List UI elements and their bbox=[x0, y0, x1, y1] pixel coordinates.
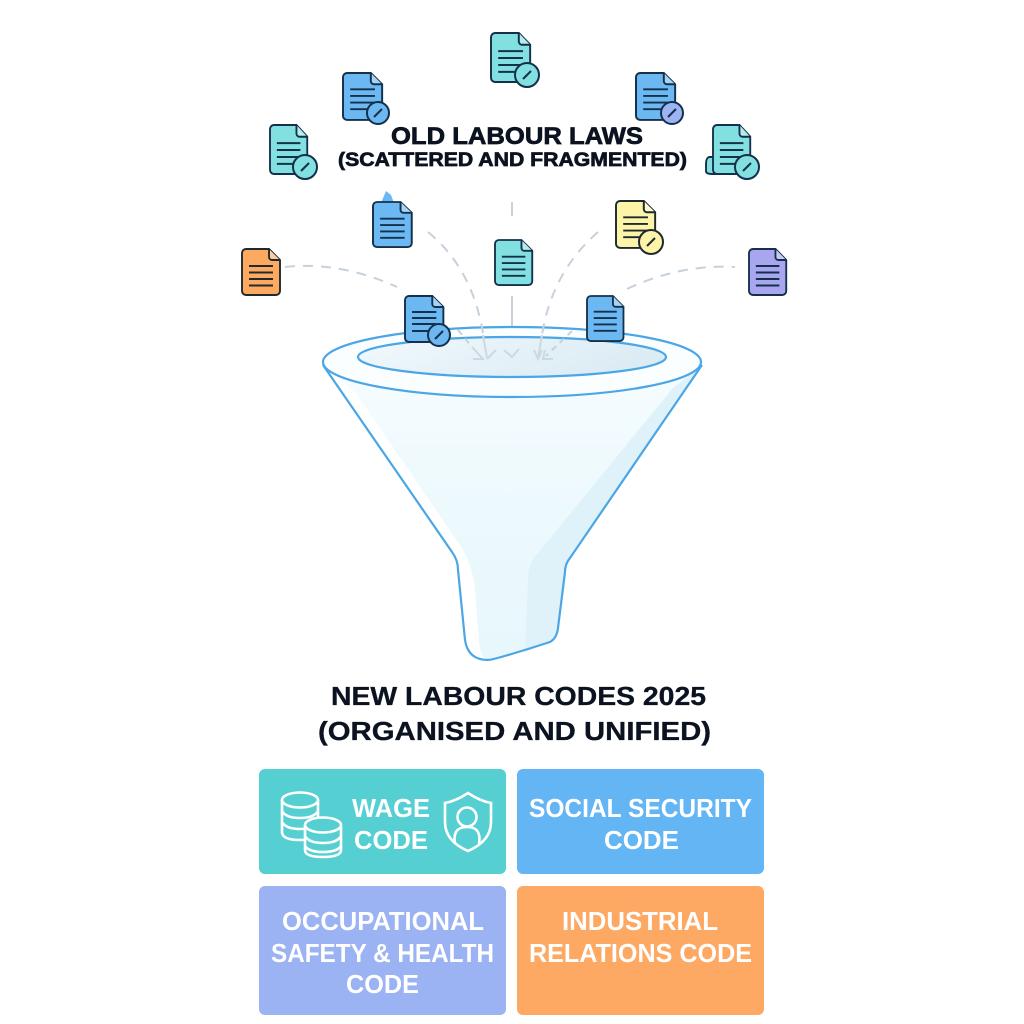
document: middle right yellow bbox=[616, 201, 655, 248]
document: upper right blue bbox=[636, 73, 675, 120]
document: middle centre teal bbox=[495, 240, 532, 285]
document: middle left blue bbox=[373, 191, 412, 247]
heading: old labour laws: (SCATTERED AND FRAGMENTED) bbox=[338, 150, 687, 171]
panel: social security code: SOCIAL SECURITY bbox=[529, 793, 752, 823]
heading: old labour laws: OLD LABOUR LAWS bbox=[391, 123, 643, 150]
icon: coin stacks bbox=[282, 792, 341, 857]
document: far left teal bbox=[270, 125, 307, 174]
label: wage code: CODE bbox=[354, 825, 428, 855]
panel: industrial relations code: RELATIONS CODE bbox=[529, 938, 752, 968]
badge: upper right bbox=[661, 102, 683, 124]
panel: occupational safety and health code: OCCUPATIONAL bbox=[282, 906, 484, 936]
document: far left orange bbox=[242, 249, 280, 295]
panel: occupational safety and health code: SAFETY & HEALTH bbox=[271, 938, 494, 968]
document: top centre teal bbox=[491, 33, 530, 82]
document: far right purple bbox=[749, 249, 786, 295]
panel: wage code bbox=[259, 769, 506, 874]
panel: occupational safety and health code: CODE bbox=[346, 969, 419, 999]
badge: yellow bbox=[639, 230, 663, 254]
funnel bbox=[323, 327, 702, 660]
panel: industrial relations code bbox=[517, 886, 764, 1015]
badge: top centre bbox=[515, 63, 539, 87]
badge: lower left bbox=[428, 324, 450, 346]
document: lower right blue bbox=[587, 296, 623, 341]
heading: old labour laws bbox=[338, 123, 687, 171]
badge: far left bbox=[293, 155, 317, 179]
label: wage code: WAGE bbox=[352, 793, 430, 823]
heading: new labour codes: (ORGANISED AND UNIFIED) bbox=[318, 716, 711, 746]
document: upper left blue bbox=[343, 73, 382, 120]
badge: upper left bbox=[367, 102, 389, 124]
panel: occupational safety and health code bbox=[259, 886, 506, 1015]
panel: social security code: CODE bbox=[604, 825, 679, 855]
panel: social security code bbox=[517, 769, 764, 874]
heading: new labour codes bbox=[318, 681, 711, 746]
badge: far right bbox=[735, 155, 759, 179]
dashed flow arrows bbox=[285, 202, 735, 359]
label: wage code bbox=[352, 793, 430, 855]
heading: new labour codes: NEW LABOUR CODES 2025 bbox=[331, 681, 706, 711]
document: far right teal bbox=[706, 125, 750, 174]
panel: industrial relations code: INDUSTRIAL bbox=[562, 906, 718, 936]
document: lower left blue bbox=[405, 296, 443, 342]
icon: shield with person bbox=[445, 793, 491, 851]
